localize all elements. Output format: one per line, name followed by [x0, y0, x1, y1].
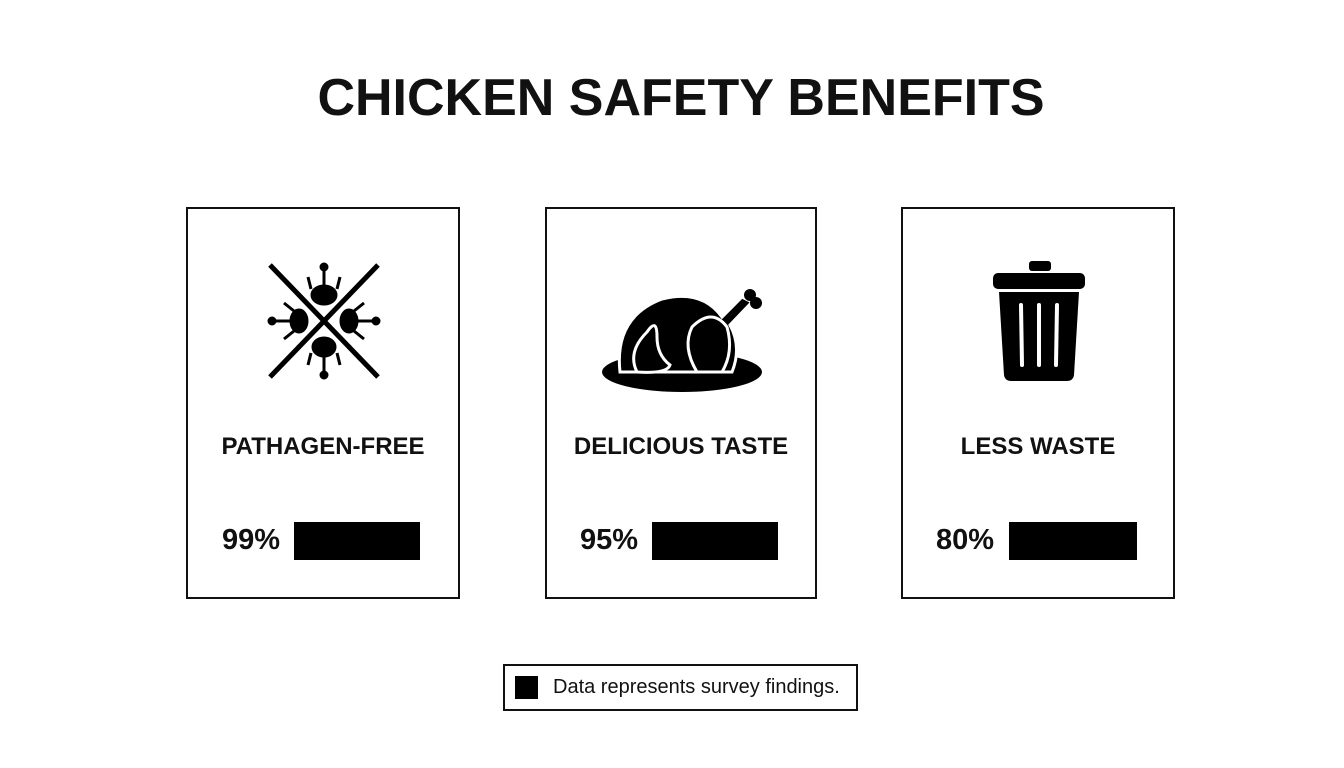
label: PATHAGEN-FREE	[221, 433, 425, 460]
panel: less waste	[901, 207, 1175, 599]
panel: delicious taste	[545, 207, 817, 599]
legend text: Data represents survey findings.	[553, 676, 840, 698]
label: LESS WASTE	[961, 433, 1115, 460]
icon: roast chicken	[602, 289, 762, 392]
stat 99%: 99%	[222, 524, 280, 556]
icon: trash can	[993, 261, 1085, 381]
legend swatch	[515, 676, 538, 699]
title: CHICKEN SAFETY BENEFITS	[317, 69, 1045, 127]
stat 80%: 80%	[936, 524, 994, 556]
bar	[294, 522, 420, 560]
bar	[652, 522, 778, 560]
panel: pathogen-free	[186, 207, 460, 599]
label: DELICIOUS TASTE	[574, 433, 788, 460]
icon: crossed virus	[268, 262, 380, 380]
legend	[503, 664, 858, 711]
bar	[1009, 522, 1137, 560]
stat 95%: 95%	[580, 524, 638, 556]
